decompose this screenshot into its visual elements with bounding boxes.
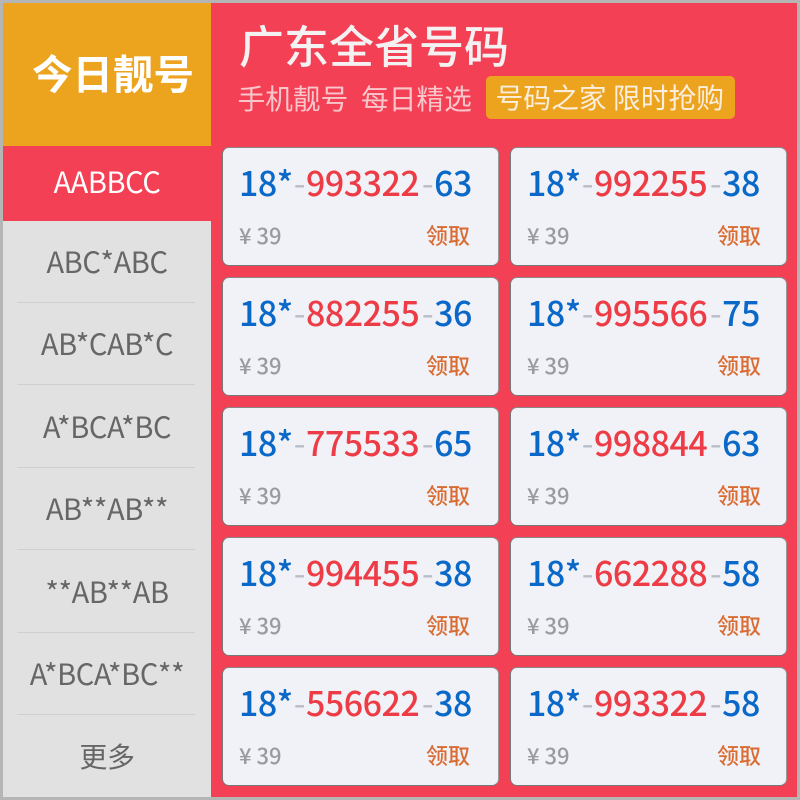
card: 18*-992255-38	[510, 147, 787, 266]
panel: sidebar	[3, 146, 211, 797]
price: ¥ 39	[239, 349, 282, 381]
badge heading: 今日靓号	[32, 42, 194, 101]
phone number: 18*-993322-63	[239, 157, 472, 206]
card: 18*-775533-65	[222, 407, 499, 526]
phone number: 18*-994455-38	[239, 547, 472, 596]
claim action: 领取	[426, 739, 470, 771]
card: 18*-882255-36	[222, 277, 499, 396]
price: ¥ 39	[239, 739, 282, 771]
sidebar item: AB**AB**: AB**AB**	[46, 487, 168, 529]
claim action: 领取	[426, 219, 470, 251]
subtitle second part: 每日精选	[361, 77, 472, 117]
price: ¥ 39	[527, 609, 570, 641]
subtitle: 手机靓号	[238, 77, 348, 117]
sidebar item: AB*CAB*C: AB*CAB*C	[41, 322, 173, 364]
sidebar item: **AB**AB: **AB**AB	[45, 570, 169, 612]
card: 18*-556622-38	[222, 667, 499, 786]
sidebar item: more: 更多	[79, 736, 135, 776]
price: ¥ 39	[239, 609, 282, 641]
panel: today's numbers badge	[3, 3, 211, 146]
phone number: 18*-995566-75	[527, 287, 760, 336]
card: 18*-995566-75	[510, 277, 787, 396]
active tab highlight	[3, 146, 211, 221]
price: ¥ 39	[239, 219, 282, 251]
price: ¥ 39	[527, 479, 570, 511]
claim action: 领取	[717, 349, 761, 381]
card: 18*-662288-58	[510, 537, 787, 656]
price: ¥ 39	[527, 739, 570, 771]
claim action: 领取	[717, 739, 761, 771]
phone number: 18*-992255-38	[527, 157, 760, 206]
phone number: 18*-993322-58	[527, 677, 760, 726]
claim action: 领取	[426, 609, 470, 641]
phone number: 18*-556622-38	[239, 677, 472, 726]
phone number: 18*-662288-58	[527, 547, 760, 596]
panel: header background	[211, 3, 797, 797]
card: 18*-993322-58	[510, 667, 787, 786]
sidebar item: A*BCA*BC: A*BCA*BC	[43, 405, 171, 447]
card: 18*-993322-63	[222, 147, 499, 266]
card: 18*-994455-38	[222, 537, 499, 656]
promo tag	[486, 76, 735, 119]
sidebar item: AABBCC: AABBCC	[54, 160, 160, 202]
price: ¥ 39	[527, 219, 570, 251]
price: ¥ 39	[239, 479, 282, 511]
sidebar item: A*BCA*BC**: A*BCA*BC**	[30, 652, 184, 694]
claim action: 领取	[717, 219, 761, 251]
phone number: 18*-998844-63	[527, 417, 760, 466]
claim action: 领取	[426, 349, 470, 381]
claim action: 领取	[426, 479, 470, 511]
phone number: 18*-882255-36	[239, 287, 472, 336]
sidebar item: ABC*ABC: ABC*ABC	[46, 240, 168, 282]
claim action: 领取	[717, 609, 761, 641]
title: 广东全省号码	[239, 11, 509, 76]
claim action: 领取	[717, 479, 761, 511]
card: 18*-998844-63	[510, 407, 787, 526]
price: ¥ 39	[527, 349, 570, 381]
phone number: 18*-775533-65	[239, 417, 472, 466]
promo tag text: 号码之家 限时抢购	[496, 77, 724, 117]
